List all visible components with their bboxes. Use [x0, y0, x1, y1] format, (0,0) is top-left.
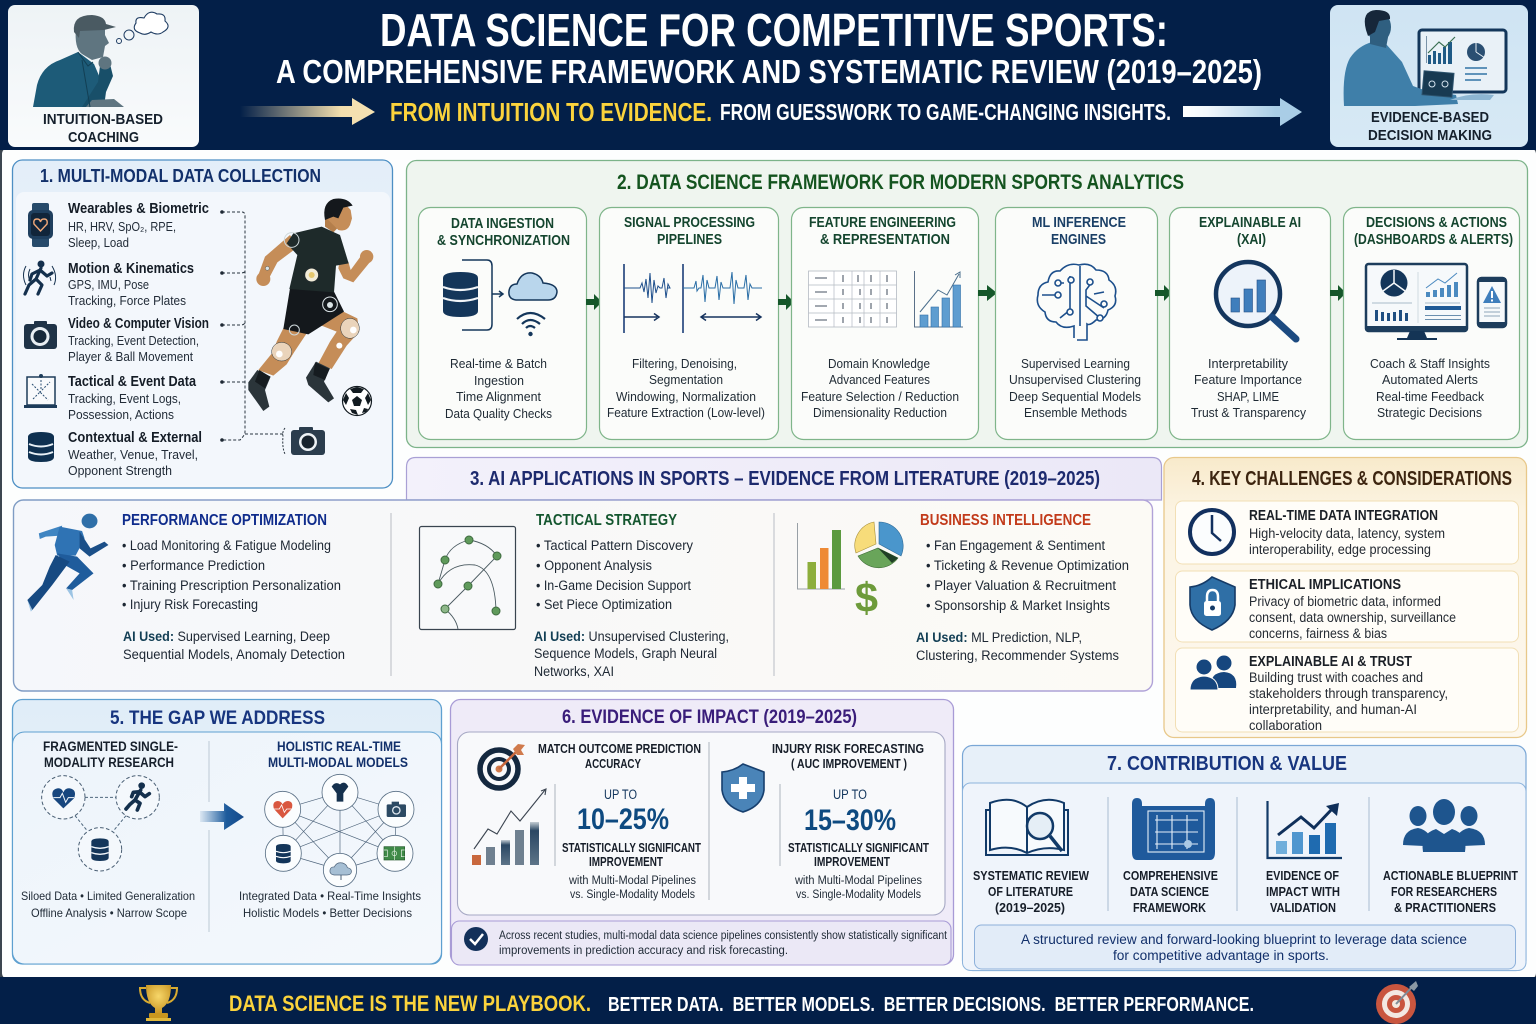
item: wearables and biometric [28, 201, 209, 250]
connectors: sensors to player [220, 210, 285, 454]
value: 15–30%: 15–30% [804, 804, 896, 837]
item: video and computer vision [24, 316, 209, 364]
card: intuition-based coaching [8, 5, 199, 147]
tagline white: FROM GUESSWORK TO GAME-CHANGING INSIGHTS. [720, 99, 1171, 125]
step 3 text: Dimensionality Reduction [813, 406, 947, 420]
step 4 text: Ensemble Methods [1024, 406, 1127, 420]
significance note: with Multi-Modal Pipelines [794, 875, 922, 887]
caption: fragmented [21, 889, 195, 920]
item: wearables and biometric: Wearables & Biometric [68, 201, 209, 217]
column: business intelligence [798, 512, 1129, 663]
label: evidence-based decision making: DECISION MAKING [1368, 127, 1492, 144]
contribution 1 label [973, 868, 1090, 915]
value: 10–25%: 10–25% [577, 803, 669, 836]
title: DATA SCIENCE FOR COMPETITIVE SPORTS: [380, 4, 1168, 56]
item: tactical and event data [24, 374, 197, 422]
icon: external camera [291, 427, 325, 455]
callout: consistent improvement: improvements in prediction accuracy and risk forecasting. [499, 945, 788, 957]
step 4 heading: ML INFERENCE [1032, 214, 1126, 231]
list: tactical uses [536, 538, 693, 612]
contribution: comprehensive framework [1123, 798, 1218, 915]
item: video and computer vision: Tracking, Event Detection, [68, 334, 199, 348]
icon: motion figure [24, 260, 56, 294]
panel 7: contribution and value [962, 746, 1526, 970]
label: intuition-based coaching: INTUITION-BASED [43, 111, 163, 128]
list: performance uses: • Load Monitoring & Fatigue Modeling [122, 538, 331, 553]
challenge: real-time data integration [1176, 501, 1518, 564]
item: contextual and external [28, 430, 202, 478]
icon: medical shield [722, 764, 764, 812]
label: evidence-based decision making [1368, 109, 1492, 144]
caption: holistic: Integrated Data • Real-Time Insights [239, 889, 421, 903]
diagram: integrated network [265, 774, 414, 887]
step 4 text: Deep Sequential Models [1009, 390, 1141, 404]
contribution 2 label: COMPREHENSIVE [1123, 868, 1218, 883]
step 1 text: Real-time & Batch [450, 357, 547, 371]
step 5 heading: (XAI) [1237, 231, 1266, 248]
panel 5: the gap we address [12, 700, 442, 964]
arrow [1155, 285, 1172, 301]
step 2 text: Segmentation [649, 373, 723, 387]
step 1 heading [437, 215, 570, 249]
item: contextual and external: Opponent Strength [68, 464, 172, 478]
significance note: with Multi-Modal Pipelines [568, 875, 696, 887]
step 3 text: Domain Knowledge [828, 357, 930, 371]
panel 7 heading: 7. CONTRIBUTION & VALUE [1107, 752, 1347, 775]
metric: injury risk forecasting [722, 742, 929, 901]
callout: consistent improvement [452, 921, 951, 965]
icon: target with arrow [480, 744, 525, 788]
challenge: real-time data integration: REAL-TIME DATA INTEGRATION [1249, 508, 1438, 524]
contribution 3 label: IMPACT WITH [1266, 884, 1340, 899]
heading: fragmented [43, 739, 178, 770]
step 2 text: Feature Extraction (Low-level) [607, 406, 765, 420]
icon: signal waveforms [624, 264, 762, 333]
icon: coach thinking [33, 12, 168, 107]
item: motion and kinematics [24, 260, 194, 308]
panel 2: data science framework [406, 160, 1528, 448]
icon: three people [1403, 799, 1485, 852]
metric 2 heading: ( AUC IMPROVEMENT ) [791, 757, 907, 771]
panel 2 heading: 2. DATA SCIENCE FRAMEWORK FOR MODERN SPORTS ANALYTICS [617, 171, 1184, 194]
contribution 3 label: VALIDATION [1270, 900, 1336, 915]
list: performance uses: • Performance Prediction [122, 558, 265, 573]
column: tactical strategy [420, 512, 729, 679]
step 6 heading [1354, 214, 1513, 248]
step 3 heading: & REPRESENTATION [820, 231, 950, 248]
callout: structured review: for competitive advantage in sports. [1113, 948, 1329, 963]
significance note: IMPROVEMENT [589, 855, 663, 869]
step 6 heading: DECISIONS & ACTIONS [1366, 214, 1507, 231]
step 6 text: Strategic Decisions [1377, 406, 1482, 420]
icon: analyst with dashboard [1344, 10, 1506, 106]
heading: fragmented: MODALITY RESEARCH [44, 755, 174, 770]
AI used: business: Clustering, Recommender Systems [916, 648, 1119, 663]
AI used: performance [123, 629, 345, 662]
item: motion and kinematics: GPS, IMU, Pose [68, 278, 149, 292]
icon: two people [1190, 656, 1236, 690]
icon: business chart, pie and dollar: $ [855, 574, 878, 621]
list: business uses: • Sponsorship & Market Insights [926, 598, 1110, 613]
arrow [978, 285, 997, 301]
callout: consistent improvement: Across recent studies, multi-modal data science pipelines consistently show statistically significant [499, 930, 948, 942]
metric: match outcome prediction [472, 742, 701, 901]
step 5 text: Feature Importance [1194, 373, 1302, 387]
label: intuition-based coaching: COACHING [68, 129, 139, 146]
panel 1 heading: 1. MULTI-MODAL DATA COLLECTION [40, 165, 321, 186]
column: performance optimization [27, 512, 345, 662]
step 3 heading [809, 214, 956, 248]
AI used: tactical [534, 629, 729, 679]
icon: tactical board [420, 526, 516, 630]
icon: blueprint scroll [1132, 798, 1215, 860]
step 2 heading: SIGNAL PROCESSING [624, 214, 755, 231]
item: video and computer vision: Player & Ball Movement [68, 350, 193, 364]
icon: shield with lock [1190, 577, 1235, 630]
AI used: tactical: AI Used: Unsupervised Clustering, [534, 629, 729, 644]
contribution 4 label: FOR RESEARCHERS [1391, 884, 1497, 899]
list: performance uses: • Training Prescription Personalization [122, 578, 341, 593]
metric 1 heading: MATCH OUTCOME PREDICTION [538, 742, 701, 756]
challenge: explainable AI and trust: interpretability, and human-AI [1249, 702, 1417, 717]
panel 6 heading: 6. EVIDENCE OF IMPACT (2019–2025) [562, 706, 857, 728]
item: video and computer vision: Video & Computer Vision [68, 316, 209, 332]
icon: feature table [808, 271, 896, 327]
icon: book and magnifier [986, 800, 1068, 855]
AI used: tactical: Sequence Models, Graph Neural [534, 646, 717, 661]
step: feature engineering [792, 208, 978, 440]
significance note: vs. Single-Modality Models [570, 889, 695, 901]
challenge: ethical implications: ETHICAL IMPLICATIONS [1249, 577, 1401, 593]
item: contextual and external: Contextual & External [68, 430, 202, 446]
left side: fragmented research [21, 739, 195, 920]
step 4 heading [1032, 214, 1126, 248]
icon: dashboard and phone [1366, 264, 1506, 340]
step 1 heading: DATA INGESTION [451, 215, 554, 232]
item: tactical and event data: Tactical & Event Data [68, 374, 197, 390]
icon: trophy [140, 985, 177, 1021]
AI used: performance: Sequential Models, Anomaly Detection [123, 647, 345, 662]
list: tactical uses: • In-Game Decision Support [536, 578, 691, 593]
step 5 heading [1199, 214, 1301, 248]
metric 2 heading [772, 742, 924, 771]
icon: camera [24, 321, 57, 349]
step 6 text [1370, 357, 1490, 420]
up to label: UP TO [604, 787, 637, 802]
AI used: tactical: Networks, XAI [534, 664, 614, 679]
step 6 text: Real-time Feedback [1376, 390, 1485, 404]
step 2 text [607, 357, 765, 420]
step 1 text [445, 357, 552, 421]
list: business uses: • Ticketing & Revenue Optimization [926, 558, 1129, 573]
heading: fragmented: FRAGMENTED SINGLE- [43, 739, 178, 754]
significance note [562, 841, 701, 901]
contribution 1 label: SYSTEMATIC REVIEW [973, 868, 1090, 883]
step 5 text: SHAP, LIME [1217, 390, 1279, 404]
caption: fragmented: Offline Analysis • Narrow Scope [31, 906, 187, 920]
icon: rising chart [1268, 801, 1342, 858]
icon: blue runner [27, 514, 108, 612]
item: contextual and external: Weather, Venue, Travel, [68, 448, 198, 462]
icon: clock [1190, 510, 1234, 554]
item: wearables and biometric: Sleep, Load [68, 236, 129, 250]
step 2 heading: PIPELINES [657, 231, 722, 248]
arrow: toward evidence [1183, 98, 1302, 126]
step: ML inference [996, 208, 1158, 440]
challenge: explainable AI and trust: EXPLAINABLE AI & TRUST [1249, 654, 1412, 670]
contribution 2 label: DATA SCIENCE [1130, 884, 1209, 899]
list: performance uses [122, 538, 341, 612]
arrow [1330, 285, 1346, 301]
step: explainable AI [1170, 208, 1330, 440]
footer band [0, 977, 1536, 1024]
step 4 text [1009, 357, 1141, 420]
icon: database [28, 432, 54, 462]
up to label: UP TO [833, 787, 867, 802]
arrow [778, 294, 794, 310]
step 1 text: Data Quality Checks [445, 407, 552, 421]
contribution: actionable blueprint [1383, 799, 1518, 915]
step 3 text: Advanced Features [829, 373, 930, 387]
AI used: performance: AI Used: Supervised Learning, Deep [123, 629, 330, 644]
callout: structured review: A structured review and forward-looking blueprint to leverage data science [1021, 932, 1467, 947]
contribution: systematic review [973, 800, 1090, 915]
heading: holistic: MULTI-MODAL MODELS [268, 755, 408, 770]
challenge: ethical implications [1176, 571, 1518, 642]
contribution 4 label: & PRACTITIONERS [1394, 900, 1496, 915]
significance note [788, 841, 929, 901]
AI used: business: AI Used: ML Prediction, NLP, [916, 630, 1082, 645]
illustration: sprinting player with sensors [248, 199, 373, 416]
heading: holistic [268, 739, 408, 770]
panel 5 heading: 5. THE GAP WE ADDRESS [110, 707, 325, 729]
significance note: IMPROVEMENT [814, 855, 890, 869]
challenge: explainable AI and trust [1176, 648, 1518, 733]
challenge: ethical implications: concerns, fairness & bias [1249, 626, 1387, 641]
metric 1 heading [538, 742, 701, 771]
contribution 2 label: FRAMEWORK [1133, 900, 1206, 915]
list: business uses: • Fan Engagement & Sentiment [926, 538, 1105, 553]
contribution 3 label [1266, 868, 1340, 915]
step 6 text: Automated Alerts [1382, 373, 1478, 387]
subtitle: A COMPREHENSIVE FRAMEWORK AND SYSTEMATIC REVIEW (2019–2025) [276, 53, 1262, 90]
card: evidence-based decision making [1330, 5, 1528, 147]
callout: structured review [974, 925, 1516, 969]
step 5 heading: EXPLAINABLE AI [1199, 214, 1301, 231]
step: data ingestion [418, 208, 586, 440]
item: wearables and biometric: HR, HRV, SpO₂, RPE, [68, 220, 176, 234]
list: business uses: • Player Valuation & Recruitment [926, 578, 1116, 593]
significance note: STATISTICALLY SIGNIFICANT [788, 841, 929, 855]
icon: feature bar chart [914, 271, 963, 327]
caption: holistic [239, 889, 421, 920]
panel 3 heading: 3. AI APPLICATIONS IN SPORTS – EVIDENCE FROM LITERATURE (2019–2025) [470, 467, 1100, 490]
challenge: real-time data integration: interoperability, edge processing [1249, 542, 1431, 557]
contribution 1 label: (2019–2025) [995, 900, 1065, 915]
step 5 text [1191, 357, 1307, 420]
AI used: business [916, 630, 1119, 663]
step 1 heading: & SYNCHRONIZATION [437, 232, 570, 249]
step 4 text: Supervised Learning [1021, 357, 1130, 371]
heading: holistic: HOLISTIC REAL-TIME [277, 739, 401, 754]
icon: rising bar chart [472, 789, 546, 865]
list: tactical uses: • Set Piece Optimization [536, 597, 672, 612]
contribution: evidence of impact [1266, 801, 1342, 915]
right side: holistic models [239, 739, 421, 920]
list: tactical uses: • Tactical Pattern Discovery [536, 538, 693, 553]
contribution 2 label [1123, 868, 1218, 915]
item: tactical and event data: Tracking, Event Logs, [68, 392, 181, 406]
icon: database to cloud and wifi [443, 260, 557, 336]
list: tactical uses: • Opponent Analysis [536, 558, 652, 573]
challenge: explainable AI and trust: stakeholders through transparency, [1249, 686, 1448, 701]
icon: magnifier over bars [1216, 262, 1296, 339]
challenge: explainable AI and trust: collaboration [1249, 718, 1322, 733]
step 1 text: Ingestion [474, 374, 524, 388]
panel 3: AI applications [14, 458, 1162, 691]
challenge: ethical implications: Privacy of biometric data, informed [1249, 594, 1441, 609]
significance note: vs. Single-Modality Models [796, 889, 921, 901]
step 6 text: Coach & Staff Insights [1370, 357, 1490, 371]
footer slogan white: BETTER DATA. BETTER MODELS. BETTER DECISIONS. BETTER PERFORMANCE. [608, 994, 1254, 1016]
arrow [586, 294, 602, 310]
title: tactical strategy: TACTICAL STRATEGY [536, 512, 677, 529]
title: business intelligence: BUSINESS INTELLIGENCE [920, 512, 1091, 529]
step 3 heading: FEATURE ENGINEERING [809, 214, 956, 231]
step 2 heading [624, 214, 755, 248]
step 5 text: Interpretability [1208, 357, 1289, 371]
icon: neural brain [1037, 264, 1116, 340]
list: performance uses: • Injury Risk Forecasting [122, 597, 258, 612]
caption: fragmented: Siloed Data • Limited Generalization [21, 889, 195, 903]
header band [0, 0, 1536, 150]
title: performance optimization: PERFORMANCE OPTIMIZATION [122, 512, 327, 529]
item: motion and kinematics: Motion & Kinematics [68, 261, 194, 277]
step 1 text: Time Alignment [456, 390, 542, 404]
step 4 heading: ENGINES [1051, 231, 1106, 248]
metric 1 heading: ACCURACY [585, 757, 642, 771]
challenge: explainable AI and trust: Building trust with coaches and [1249, 670, 1423, 685]
footer slogan yellow: DATA SCIENCE IS THE NEW PLAYBOOK. [229, 991, 591, 1016]
caption: holistic: Holistic Models • Better Decisions [243, 906, 412, 920]
panel 4: key challenges [1164, 458, 1526, 738]
arrow: gap to holistic [200, 803, 244, 830]
metric 2 heading: INJURY RISK FORECASTING [772, 742, 924, 756]
step 3 text [801, 357, 959, 420]
step: decisions and actions [1344, 208, 1520, 440]
step 2 text: Windowing, Normalization [616, 390, 756, 404]
contribution 1 label: OF LITERATURE [988, 884, 1073, 899]
arrow: intuition to evidence [240, 98, 375, 125]
label: evidence-based decision making: EVIDENCE-BASED [1371, 109, 1489, 126]
list: business uses [926, 538, 1129, 613]
icon: smartwatch [28, 203, 53, 247]
icon: tactical laptop [24, 374, 57, 408]
step 3 text: Feature Selection / Reduction [801, 390, 959, 404]
step: signal processing [600, 208, 778, 440]
challenge: real-time data integration: High-velocity data, latency, system [1249, 526, 1445, 541]
icon: soccer ball [342, 386, 372, 416]
contribution 3 label: EVIDENCE OF [1266, 868, 1339, 883]
step 4 text: Unsupervised Clustering [1009, 373, 1141, 387]
step 2 text: Filtering, Denoising, [632, 357, 737, 371]
label: intuition-based coaching [43, 111, 163, 146]
panel 6: evidence of impact [450, 700, 954, 965]
challenge: ethical implications: consent, data ownership, surveillance [1249, 610, 1456, 625]
icon: target [1376, 981, 1418, 1024]
item: tactical and event data: Possession, Actions [68, 408, 174, 422]
icon: business chart, pie and dollar [798, 522, 903, 621]
diagram: siloed data icons [42, 776, 159, 871]
step 5 text: Trust & Transparency [1191, 406, 1307, 420]
significance note: STATISTICALLY SIGNIFICANT [562, 841, 701, 855]
panel 1: multi-modal data collection [12, 160, 392, 488]
item: motion and kinematics: Tracking, Force Plates [68, 294, 186, 308]
icon: check badge [464, 927, 488, 951]
tagline yellow: FROM INTUITION TO EVIDENCE. [390, 97, 712, 127]
contribution 4 label [1383, 868, 1518, 915]
